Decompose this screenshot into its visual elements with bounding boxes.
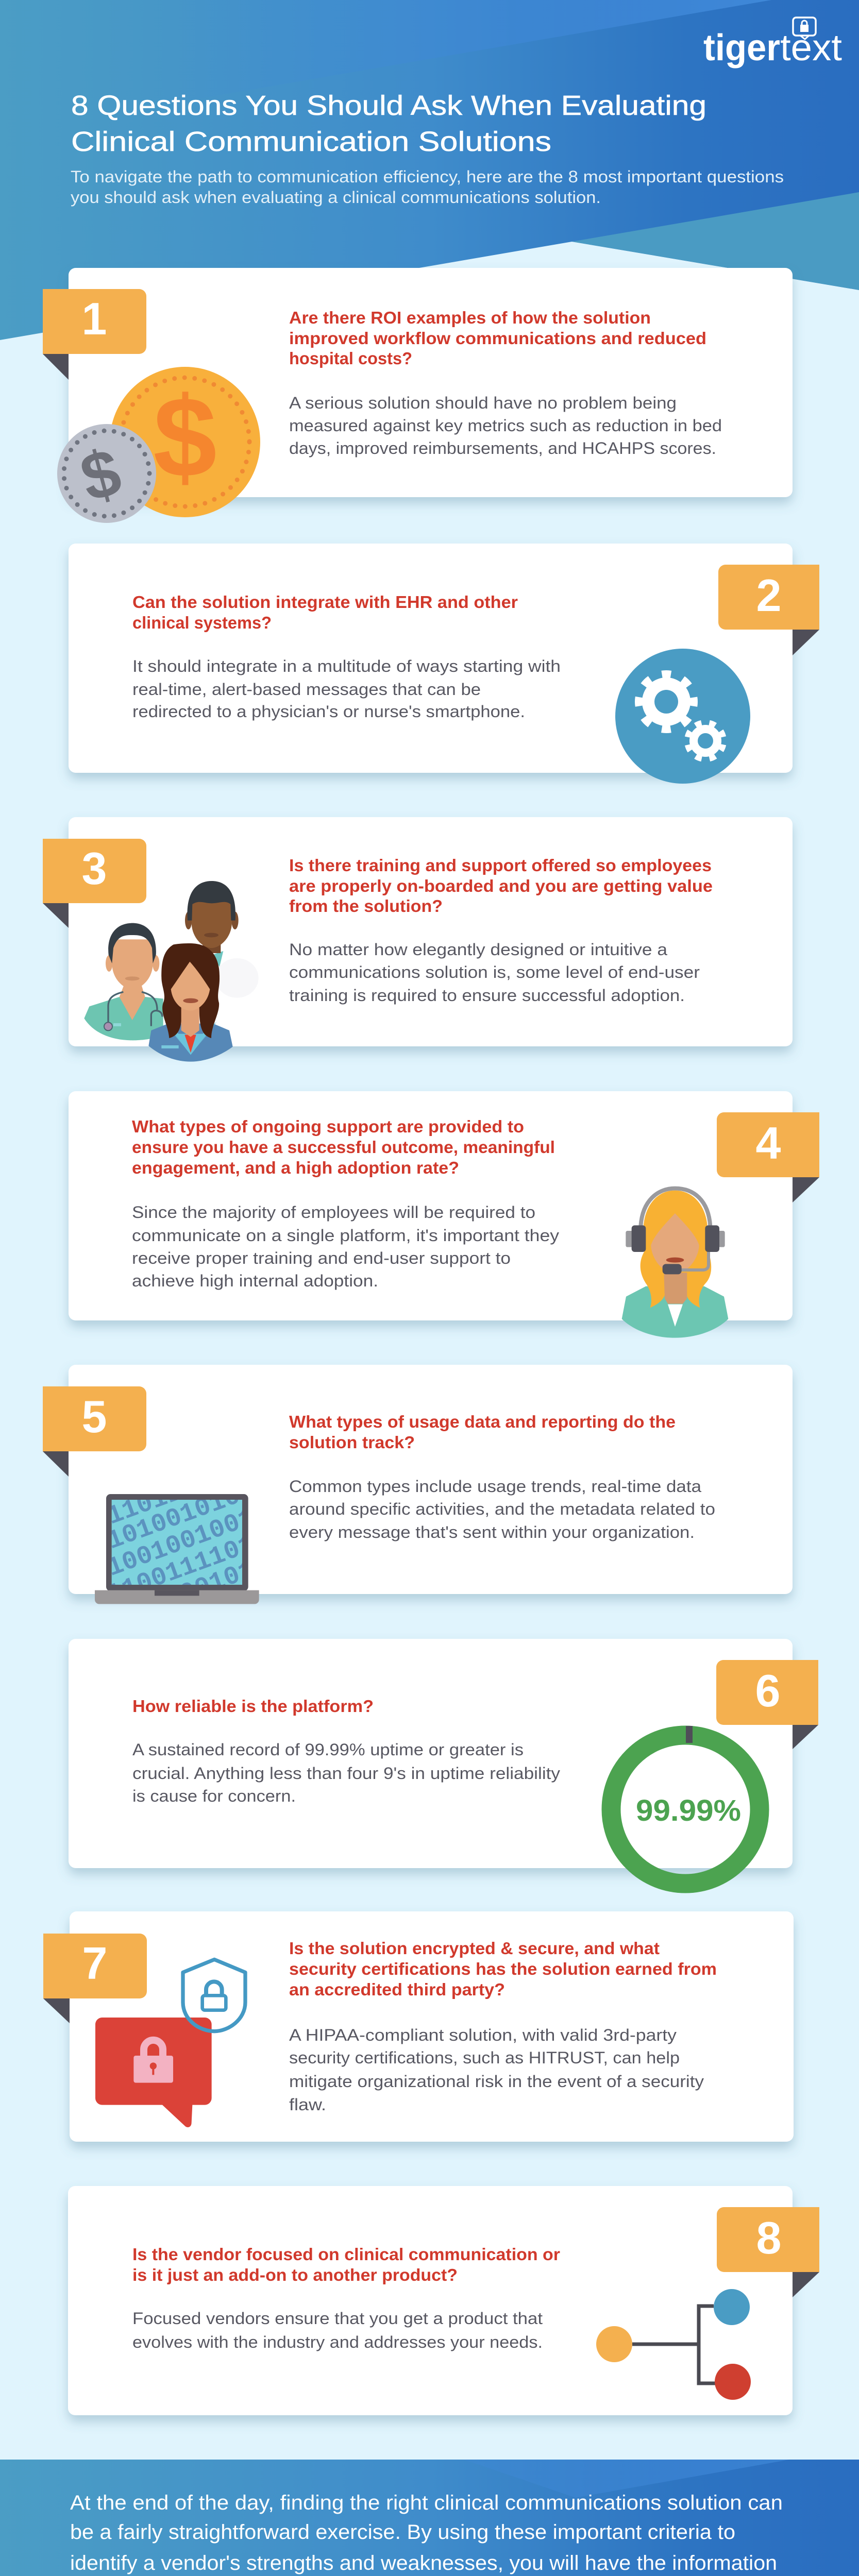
number badge 5: 5 [82, 1391, 107, 1442]
chart: 99.99% uptime ring [611, 1726, 760, 1884]
number badge 2 [718, 565, 819, 655]
question heading: Is the vendor focused on clinical communication or [132, 2245, 560, 2264]
answer text: days, improved reimbursements, and HCAHPS scores. [289, 439, 716, 457]
answer text: every message that's sent within your organization. [289, 1523, 695, 1541]
card background [69, 1091, 793, 1320]
answer text [132, 1203, 559, 1290]
question heading: What types of usage data and reporting do the [289, 1412, 676, 1431]
answer text: crucial. Anything less than four 9's in uptime reliability [132, 1764, 560, 1783]
question heading [289, 308, 706, 368]
logo: tigertext [703, 18, 842, 69]
question heading: clinical systems? [132, 613, 272, 632]
icon: branching diagram [596, 2289, 751, 2400]
question heading: Is the solution encrypted & secure, and what [289, 1939, 660, 1958]
answer text [289, 2026, 704, 2114]
conclusion text: At the end of the day, finding the right clinical communications solution can [70, 2492, 783, 2514]
answer text [289, 940, 700, 1005]
question heading: Is there training and support offered so employees [289, 856, 712, 875]
question heading: hospital costs? [289, 349, 412, 368]
question heading: security certifications has the solution earned from [289, 1959, 717, 1978]
card background [69, 817, 793, 1046]
answer text: Focused vendors ensure that you get a product that [132, 2309, 543, 2328]
number badge 6 [716, 1660, 818, 1749]
number badge 8 [717, 2207, 819, 2297]
number badge 2: 2 [756, 570, 781, 621]
icon: secure message and shield [95, 1959, 245, 2127]
card background [69, 1365, 793, 1594]
conclusion text: identify a vendor's strengths and weaknesses, you will have the information [70, 2552, 777, 2574]
intro text: you should ask when evaluating a clinical communications solution. [71, 188, 601, 207]
title [71, 90, 706, 157]
answer text: mitigate organizational risk in the event of a security [289, 2072, 704, 2091]
number badge 5 [43, 1386, 146, 1477]
conclusion text: be a fairly straightforward exercise. By using these important criteria to [70, 2521, 735, 2544]
panel: question 4 [69, 1091, 819, 1338]
answer text: security certifications, such as HITRUST, can help [289, 2048, 680, 2067]
answer text: A sustained record of 99.99% uptime or greater is [132, 1740, 524, 1759]
answer text: Since the majority of employees will be required to [132, 1203, 535, 1222]
panel: question 5 [43, 1365, 798, 1605]
question heading: an accredited third party? [289, 1980, 505, 1999]
chart: 99.99% uptime ring: 99.99% [636, 1794, 741, 1827]
card background [69, 268, 793, 497]
answer text: communications solution is, some level of end-user [289, 963, 700, 981]
question heading [132, 2245, 560, 2284]
question heading: Are there ROI examples of how the solution [289, 308, 651, 327]
question heading: ensure you have a successful outcome, meaningful [132, 1138, 555, 1157]
answer text [132, 2309, 543, 2351]
icon: coins: $ [153, 374, 217, 501]
number badge 7 [43, 1934, 147, 2023]
panel: question 1 [43, 268, 793, 523]
icon: laptop with binary data: 1011011001011 [75, 1446, 273, 1543]
question heading: is it just an add-on to another product? [132, 2265, 458, 2284]
icon: laptop with binary data: 0010100101001 [75, 1471, 273, 1567]
answer text: communicate on a single platform, it's important they [132, 1226, 559, 1245]
answer text: real-time, alert-based messages that can be [132, 680, 481, 699]
answer text: A HIPAA-compliant solution, with valid 3rd-party [289, 2026, 677, 2044]
question heading [289, 1412, 676, 1452]
panel: question 8 [68, 2186, 819, 2415]
intro text: To navigate the path to communication efficiency, here are the 8 most important questions [71, 167, 784, 186]
logo: tigertext: tiger [703, 27, 780, 69]
number badge 8: 8 [756, 2212, 781, 2263]
number badge 4 [717, 1112, 819, 1202]
header background [0, 0, 859, 340]
answer text: A serious solution should have no problem being [289, 394, 677, 412]
answer text: Common types include usage trends, real-time data [289, 1477, 701, 1496]
question heading: from the solution? [289, 896, 443, 916]
question heading [289, 856, 713, 916]
question heading [132, 1117, 555, 1177]
question heading: Can the solution integrate with EHR and other [132, 592, 518, 612]
card background [70, 1911, 794, 2142]
answer text [289, 1477, 715, 1541]
answer text: receive proper training and end-user support to [132, 1249, 511, 1267]
question heading: How reliable is the platform? [132, 1697, 374, 1716]
title: 8 Questions You Should Ask When Evaluating [71, 90, 706, 121]
icon: coins: $ [73, 434, 128, 516]
icon: laptop with binary data: 1000101001011 [75, 1550, 273, 1647]
answer text: training is required to ensure successful adoption. [289, 986, 685, 1005]
number badge 3 [43, 839, 146, 928]
icon: gears [615, 649, 750, 784]
number badge 6: 6 [755, 1665, 780, 1716]
icon: laptop with binary data: 0011001111011 [75, 1524, 273, 1621]
icon: medical staff [84, 881, 259, 1062]
icon: coins [57, 367, 260, 523]
question heading: are properly on-boarded and you are getting value [289, 876, 713, 895]
answer text: is cause for concern. [132, 1787, 296, 1805]
intro text [71, 167, 784, 207]
number badge 1: 1 [82, 293, 107, 344]
number badge 4: 4 [756, 1117, 781, 1168]
title: Clinical Communication Solutions [71, 126, 551, 157]
question heading: solution track? [289, 1433, 415, 1452]
card background [69, 1639, 793, 1868]
answer text: It should integrate in a multitude of ways starting with [132, 657, 561, 675]
answer text: No matter how elegantly designed or intuitive a [289, 940, 667, 959]
answer text [289, 394, 722, 457]
panel: question 3 [43, 817, 793, 1062]
number badge 3: 3 [82, 843, 107, 894]
question heading: improved workflow communications and reduced [289, 329, 706, 348]
card background [68, 2186, 793, 2415]
conclusion text [70, 2492, 783, 2576]
question heading: What types of ongoing support are provided to [132, 1117, 524, 1136]
panel: question 2 [69, 544, 819, 784]
answer text: around specific activities, and the metadata related to [289, 1500, 715, 1518]
answer text: evolves with the industry and addresses your needs. [132, 2333, 543, 2351]
answer text: flaw. [289, 2095, 326, 2114]
question heading: engagement, and a high adoption rate? [132, 1158, 459, 1177]
number badge 7: 7 [82, 1938, 107, 1989]
question heading [132, 592, 518, 632]
answer text [132, 657, 561, 721]
answer text: measured against key metrics such as reduction in bed [289, 416, 722, 435]
question heading [289, 1939, 717, 1999]
icon: laptop with binary data: 0110010010011 [75, 1498, 273, 1594]
number badge 1 [43, 289, 146, 380]
panel: conclusion band [0, 2460, 859, 2576]
panel: question 6 [69, 1639, 818, 1884]
icon: support agent [622, 1189, 728, 1338]
answer text: redirected to a physician's or nurse's smartphone. [132, 702, 525, 721]
card background [69, 544, 793, 773]
answer text: achieve high internal adoption. [132, 1272, 378, 1290]
logo: tigertext: text [780, 27, 842, 69]
panel: question 7 [43, 1911, 794, 2142]
answer text [132, 1740, 560, 1805]
